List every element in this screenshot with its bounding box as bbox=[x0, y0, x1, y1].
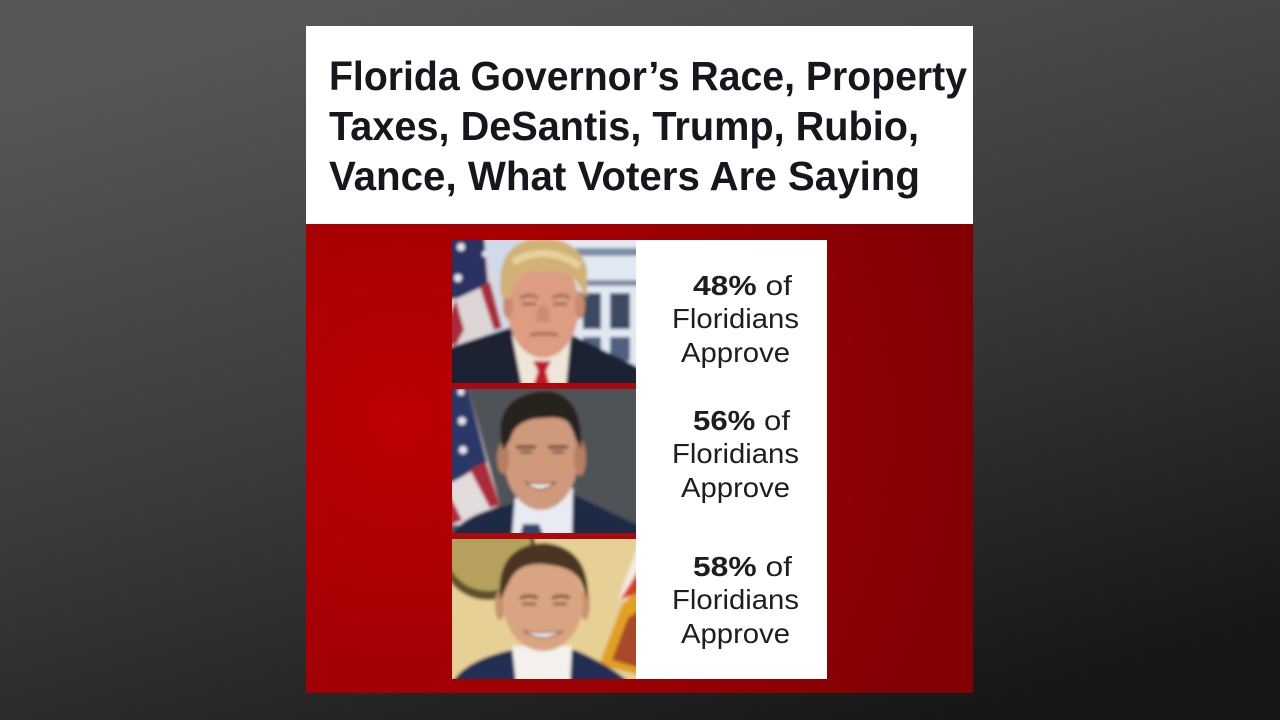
red panel bbox=[306, 224, 973, 693]
stat: DeSantis approval: Floridians bbox=[672, 584, 799, 615]
portrait: Trump bbox=[448, 236, 640, 387]
portrait: DeSantis bbox=[452, 539, 636, 679]
flag stars bbox=[454, 243, 488, 282]
title bbox=[329, 53, 967, 199]
title: Taxes, DeSantis, Trump, Rubio, bbox=[329, 103, 919, 149]
title: Florida Governor’s Race, Property bbox=[329, 53, 967, 99]
stat: Trump approval: 48% of bbox=[693, 270, 792, 301]
stat: DeSantis approval: 58% of bbox=[693, 551, 792, 582]
title panel bbox=[306, 26, 973, 224]
stat: Trump approval bbox=[672, 270, 799, 368]
stat: Rubio approval bbox=[672, 405, 799, 503]
stat: Rubio approval: Approve bbox=[681, 472, 790, 503]
graphic card bbox=[306, 26, 973, 693]
divider: portrait 2 to 3 bbox=[452, 533, 636, 539]
stat: Rubio approval: 56% of bbox=[693, 405, 790, 436]
stat: Trump approval: Approve bbox=[681, 337, 790, 368]
stat: DeSantis approval: Approve bbox=[681, 618, 790, 649]
stat: DeSantis approval bbox=[672, 551, 799, 649]
white approval column bbox=[636, 240, 827, 679]
stat: Trump approval: Floridians bbox=[672, 303, 799, 334]
portrait: Rubio bbox=[448, 385, 640, 537]
divider: portrait 1 to 2 bbox=[452, 383, 636, 389]
stat: Rubio approval: Floridians bbox=[672, 438, 799, 469]
title: Vance, What Voters Are Saying bbox=[329, 153, 920, 199]
